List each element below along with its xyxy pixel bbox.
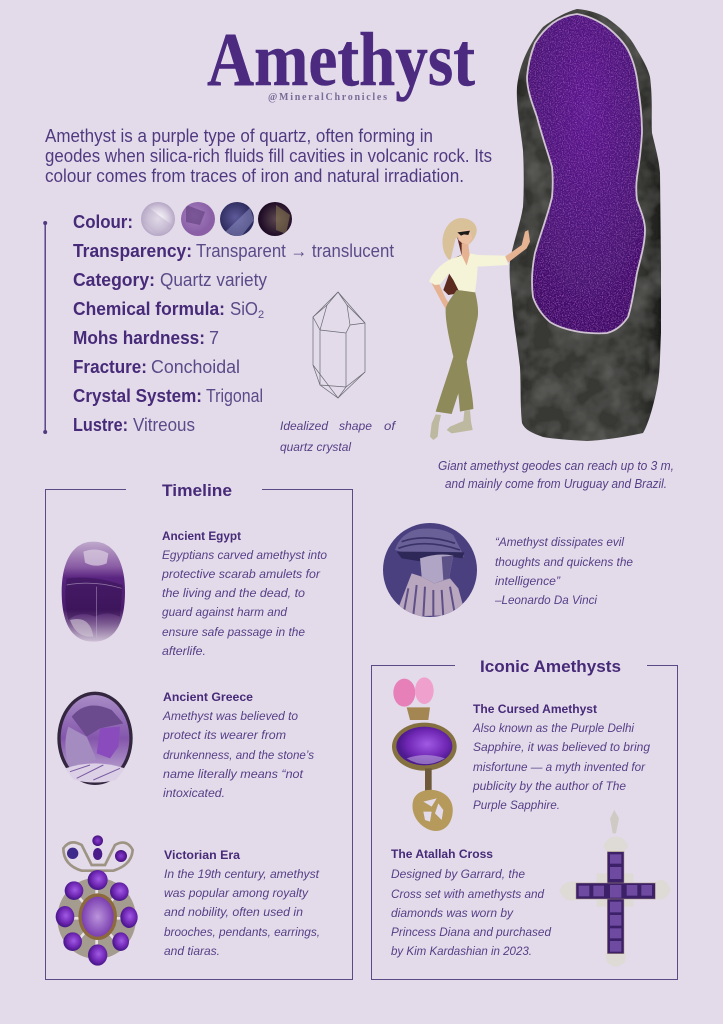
- geode crystal interior: [527, 14, 645, 333]
- ancient greece text: drunkenness, and the stone’s: [163, 748, 314, 762]
- victorian era text: brooches, pendants, earrings,: [164, 925, 320, 939]
- crystal caption: [280, 421, 397, 454]
- timeline frame: [46, 490, 352, 980]
- trousers: [436, 290, 478, 414]
- mohs hardness row: Mohs hardness:: [73, 328, 205, 348]
- victorian era entry: [56, 835, 320, 966]
- atallah cross entry: [391, 810, 671, 967]
- list rail: [43, 221, 47, 434]
- atallah cross text: The Atallah Cross: [391, 847, 493, 861]
- ancient greece text: [162, 690, 314, 800]
- victorian era text: In the 19th century, amethyst: [164, 867, 320, 881]
- left forearm: [432, 283, 448, 309]
- ancient egypt text: afterlife.: [162, 644, 206, 658]
- ancient greece text: Ancient Greece: [163, 690, 253, 704]
- geode caption: and mainly come from Uruguay and Brazil.: [445, 476, 667, 491]
- colour row: Colour:: [73, 212, 133, 232]
- atallah cross text: Designed by Garrard, the: [391, 867, 525, 881]
- face: [457, 229, 472, 245]
- transparency row: Transparent → translucent: [196, 241, 394, 261]
- ancient egypt text: protective scarab amulets for: [161, 567, 321, 581]
- atallah cross text: [391, 847, 552, 958]
- victorian era text: and tiaras.: [164, 944, 220, 958]
- mohs hardness row: 7: [209, 328, 219, 348]
- quote: intelligence”: [495, 574, 561, 588]
- victorian era text: was popular among royalty: [164, 886, 309, 900]
- illustration: giant amethyst geode: [510, 9, 661, 441]
- lustre row: Lustre:: [73, 415, 128, 435]
- timeline heading: Timeline: [162, 481, 232, 500]
- ancient greece text: protect its wearer from: [162, 728, 286, 742]
- atallah cross text: diamonds was worn by: [391, 906, 514, 920]
- category row: [73, 270, 267, 290]
- atallah cross text: Princess Diana and purchased: [391, 925, 552, 939]
- cursed amethyst text: Sapphire, it was believed to bring: [473, 740, 650, 754]
- category row: Category:: [73, 270, 155, 290]
- ancient greece text: name literally means “not: [163, 767, 304, 781]
- cursed amethyst text: The Cursed Amethyst: [473, 702, 597, 716]
- chemical formula row: SiO: [230, 299, 258, 319]
- cursed amethyst entry: [392, 677, 650, 831]
- neck: [462, 243, 470, 267]
- atallah cross text: by Kim Kardashian in 2023.: [391, 944, 532, 958]
- image: atallah cross: [559, 810, 671, 967]
- properties list: [43, 202, 394, 435]
- category row: Quartz variety: [160, 270, 267, 290]
- intro paragraph: Amethyst is a purple type of quartz, often forming in: [45, 126, 433, 146]
- geode rock: [510, 9, 661, 441]
- crystal system row: Crystal System:: [73, 386, 202, 406]
- ancient egypt entry: [62, 529, 327, 658]
- right shoe: [447, 410, 473, 433]
- panel: iconic amethysts: [372, 657, 678, 980]
- crystal caption: Idealized: [280, 421, 329, 433]
- victorian era text: Victorian Era: [164, 848, 240, 862]
- icon: quartz crystal outline: [313, 292, 365, 398]
- atallah cross text: Cross set with amethysts and: [391, 887, 545, 901]
- crystal caption: of: [384, 421, 397, 433]
- cursed amethyst text: [472, 702, 650, 812]
- iconic heading: Iconic Amethysts: [480, 657, 621, 676]
- transparency row: Transparency:: [73, 241, 192, 261]
- victorian era text: [164, 848, 320, 958]
- geode caption: Giant amethyst geodes can reach up to 3 m,: [438, 458, 674, 473]
- crystal caption: quartz crystal: [280, 442, 351, 454]
- victorian era text: and nobility, often used in: [164, 905, 303, 919]
- crystal system row: Trigonal: [206, 386, 263, 406]
- hat: [442, 218, 477, 261]
- crystal caption: shape: [339, 421, 372, 433]
- geode pale rim: [527, 14, 645, 333]
- transparency row: [73, 241, 394, 261]
- cursed amethyst text: Purple Sapphire.: [473, 798, 560, 812]
- image: victorian brooch: [56, 835, 138, 966]
- geode caption: [438, 458, 674, 491]
- iconic frame: [372, 666, 678, 980]
- sunglasses: [457, 231, 470, 236]
- ancient greece entry: [57, 690, 314, 800]
- title: Amethyst: [207, 18, 475, 102]
- left shoe: [430, 414, 441, 440]
- intro paragraph: colour comes from traces of iron and natural irradiation.: [45, 166, 464, 186]
- ancient egypt text: Egyptians carved amethyst into: [162, 548, 327, 562]
- ancient greece text: intoxicated.: [163, 786, 225, 800]
- hair: [443, 235, 467, 295]
- chemical formula row: 2: [258, 309, 264, 321]
- ancient greece text: Amethyst was believed to: [162, 709, 298, 723]
- lustre row: Vitreous: [133, 415, 195, 435]
- quote: “Amethyst dissipates evil: [495, 535, 625, 549]
- quote: thoughts and quickens the: [495, 555, 633, 569]
- cursed amethyst text: publicity by the author of The: [472, 779, 626, 793]
- cursed amethyst text: Also known as the Purple Delhi: [472, 721, 635, 735]
- image: athena cameo: [57, 692, 133, 785]
- quote: [494, 535, 633, 607]
- quote: –Leonardo Da Vinci: [494, 593, 598, 607]
- ancient egypt text: guard against harm and: [162, 605, 288, 619]
- ancient egypt text: ensure safe passage in the: [162, 625, 305, 639]
- illustration: woman explorer: [429, 218, 530, 440]
- ancient egypt text: the living and the dead, to: [162, 586, 305, 600]
- image: cursed amethyst pendant: [392, 677, 457, 831]
- fracture row: Fracture:: [73, 357, 147, 377]
- lustre row: [73, 415, 195, 435]
- intro paragraph: geodes when silica-rich fluids fill cavities in volcanic rock. Its: [45, 146, 492, 166]
- intro paragraph: [45, 126, 492, 186]
- handle: @MineralChronicles: [268, 92, 387, 103]
- fracture row: [73, 357, 240, 377]
- cursed amethyst text: misfortune — a myth invented for: [473, 760, 646, 774]
- right forearm and hand: [505, 230, 530, 262]
- ancient egypt text: [161, 529, 327, 658]
- blouse: [429, 253, 508, 292]
- image: amethyst scarab: [62, 542, 125, 642]
- chemical formula row: Chemical formula:: [73, 299, 225, 319]
- panel: timeline: [46, 481, 352, 980]
- colour row: [73, 202, 292, 238]
- portrait: Leonardo da Vinci: [383, 523, 477, 617]
- fracture row: Conchoidal: [151, 357, 240, 377]
- ancient egypt text: Ancient Egypt: [162, 529, 241, 543]
